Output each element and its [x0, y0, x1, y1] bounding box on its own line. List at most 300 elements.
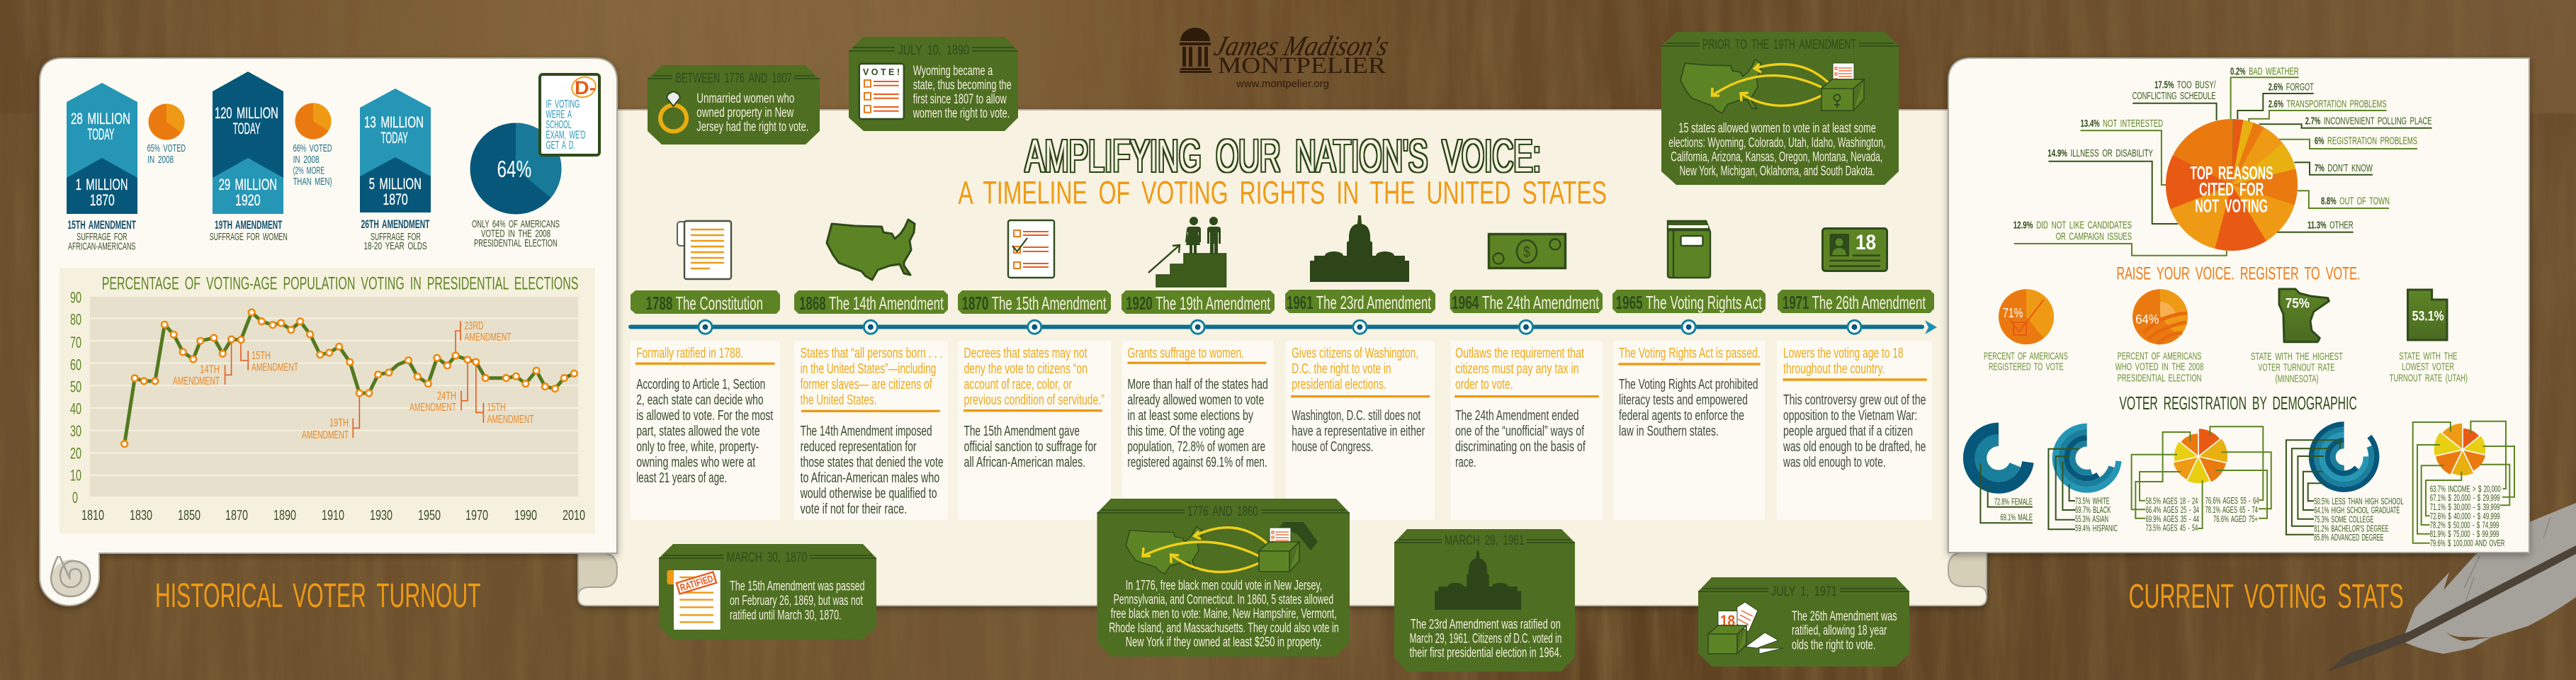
panel: 19th amendment: this time. Of the voting age [1127, 424, 1244, 439]
callout: prior to the 19th amendment: New York, Michigan, Oklahoma, and South Dakota. [1679, 164, 1875, 179]
illustration: women voting arrows from ballot box [1680, 60, 1864, 113]
y axis labels: 70 [70, 334, 81, 351]
callout: july 1, 1971: The 26th Amendment was [1792, 609, 1897, 624]
income labels [2413, 421, 2514, 548]
stat: 26th amendment arrow: SUFFRAGE FOR [371, 231, 421, 243]
pie leader labels: 14.9% ILLNESS OR DISABILITY [2047, 148, 2153, 159]
icon: constitution document [677, 221, 731, 279]
panel: 14th amendment: vote if not for their race. [801, 502, 907, 517]
callout: between 1776 and 1807: owned property in New [696, 106, 793, 120]
pie leader labels: 8.8% OUT OF TOWN [2321, 196, 2390, 208]
y axis labels: 10 [70, 466, 81, 484]
callout: july 10, 1890: Wyoming became a [913, 64, 993, 79]
income labels: 71.1% $ 30,000 - $ 39,999 [2430, 502, 2500, 512]
panel: voting rights act: federal agents to enforce the [1619, 408, 1744, 424]
icon: temple [1180, 28, 1211, 73]
label: 1961: 1961 The 23rd Amendment [1287, 292, 1431, 313]
stat: 19th amendment arrow: TODAY [233, 120, 261, 137]
panel: 23rd amendment: Washington, D.C. still does not [1292, 408, 1420, 424]
callout: march 29, 1961: MARCH 29, 1961 [1445, 533, 1524, 548]
callout: 1776 and 1860 [1097, 499, 1350, 657]
panel: the constitution: is allowed to vote. For the most [636, 408, 774, 424]
x axis labels: 1950 [418, 508, 441, 523]
y axis labels: 30 [70, 422, 81, 440]
chart: age wedge pie [2173, 428, 2228, 484]
callout: school exam note: WERE A [546, 109, 572, 120]
income labels: 78.2% $ 50,000 - $ 74,999 [2430, 520, 2499, 530]
panel: the constitution: 2, each state can decide who [636, 392, 764, 408]
income labels: 63.7% INCOME > $ 20,000 [2430, 483, 2501, 494]
stat: 26th amendment arrow [360, 89, 431, 252]
callout: 1776 and 1860: free black men to vote: Maine, New Hampshire, Vermont, [1111, 607, 1337, 622]
panel: the constitution: part, states allowed the vote [636, 424, 760, 439]
chart: education radial: 50.5% LESS THAN HIGH SCHOOL [2314, 496, 2404, 506]
chart: top reasons pie: CITED FOR [2199, 178, 2264, 200]
callout: school exam note [540, 74, 599, 155]
callout: between 1776 and 1807: Jersey had the right to vote. [696, 120, 808, 135]
panel: voting rights act: The Voting Rights Act prohibited [1619, 377, 1758, 392]
label: 1870 [958, 290, 1111, 314]
icon: Utah map: LOWEST VOTER [2402, 362, 2454, 373]
panel: 19th amendment: already allowed women to vote [1127, 392, 1264, 408]
x axis labels: 1890 [273, 508, 296, 523]
chart: 64% voted pie [2115, 289, 2203, 384]
age labels: 76.6% AGES 55 - 64 [2205, 495, 2259, 506]
callout: school exam note: IF VOTING [546, 98, 580, 110]
panel: 24th amendment: citizens must pay any tax in [1455, 361, 1579, 377]
icon: Minnesota map: 75% [2286, 296, 2310, 312]
callout: march 29, 1961: March 29, 1961. Citizens of D.C. voted in [1410, 632, 1561, 647]
chart: 71% registered pie [1984, 289, 2068, 373]
panel: 19th amendment: population, 72.8% of women are [1127, 439, 1265, 455]
pie leader labels: 12.9% DID NOT LIKE CANDIDATES [2013, 220, 2132, 232]
chart: income wedge pie [2434, 423, 2486, 476]
chart: education radial: 64.1% HIGH SCHOOL GRADUATE [2314, 504, 2400, 516]
age labels: 69.9% AGES 35 - 44 [2146, 514, 2199, 524]
subtitle: A TIMELINE OF VOTING RIGHTS IN THE UNITED STATES [958, 174, 1607, 211]
logo: James Madison's Montpelier: MONTPELIER [1218, 53, 1386, 79]
panel: 15th amendment: previous condition of servitude.” [964, 392, 1105, 408]
callout: 1776 and 1860: 1776 AND 1860 [1187, 504, 1258, 519]
panel: 24th amendment: race. [1455, 455, 1476, 470]
panel: 15th amendment: Decrees that states may not [964, 346, 1088, 361]
callout: prior to the 19th amendment: elections: Wyoming, Colorado, Utah, Idaho, Washington, [1668, 136, 1885, 151]
chart: race radial: 73.5% WHITE [2075, 496, 2110, 506]
stat: 19th amendment arrow: 19TH AMENDMENT [215, 218, 283, 232]
icon: Utah map: TURNOUT RATE (UTAH) [2390, 373, 2468, 384]
panel: the constitution: Formally ratified in 1788. [636, 346, 743, 361]
y axis labels: 80 [70, 310, 81, 329]
pie leader labels: 17.5% TOO BUSY/ [2154, 80, 2216, 91]
chart: 64% voted pie: PERCENT OF AMERICANS [2118, 351, 2201, 362]
stat: 26th amendment arrow: 18-20 YEAR OLDS [364, 240, 427, 252]
y axis labels: 20 [70, 445, 81, 462]
age labels: 66.4% AGES 25 - 34 [2146, 504, 2199, 515]
panel: 26th amendment: throughout the country. [1783, 361, 1885, 377]
icon: ballot with check [1008, 220, 1054, 278]
panel: 14th amendment: the United States. [801, 392, 876, 408]
icon: ratified document [667, 570, 721, 630]
chart: 66% voted pie [293, 103, 332, 188]
income labels: 79.6% $ 100,000 AND OVER [2430, 538, 2504, 548]
timeline arrow [628, 320, 1937, 334]
age labels: 78.1% AGES 65 - 74 [2205, 504, 2258, 515]
panel: 26th amendment [1777, 341, 1932, 520]
chart: 66% voted pie: (2% MORE [293, 164, 324, 177]
label: 1971 [1778, 290, 1934, 313]
icon: feather quill [2327, 503, 2576, 672]
panel: 19th amendment: More than half of the states had [1127, 377, 1268, 392]
chart: 66% voted pie: 66% VOTED [293, 142, 332, 154]
y axis labels: 90 [70, 289, 81, 306]
chart: education radial [2286, 424, 2404, 543]
x axis labels: 2010 [563, 508, 585, 523]
age labels: 76.6% AGED 75+ [2213, 514, 2258, 524]
amendment annotations: AMENDMENT [302, 429, 349, 441]
amendment annotations: 24TH [437, 390, 456, 402]
panel: the constitution: According to Article 1, Section [636, 377, 765, 392]
amendment annotations: 14TH [200, 364, 220, 375]
callout: between 1776 and 1807: Unmarried women who [696, 91, 794, 106]
panel: 23rd amendment: have a representative in either [1292, 424, 1425, 439]
y axis labels [70, 289, 81, 506]
stat: 15th amendment arrow: AFRICAN-AMERICANS [68, 241, 135, 252]
stat: 15th amendment arrow [67, 83, 137, 252]
amendment annotations: AMENDMENT [252, 361, 298, 374]
pie leader labels: 11.3% OTHER [2307, 220, 2354, 231]
icon: 18 ballot box: 18 [1720, 612, 1735, 630]
callout: march 29, 1961 [1394, 529, 1575, 672]
pie leader labels: 7% DON'T KNOW [2315, 163, 2373, 174]
logo: James Madison's Montpelier: James Madison's [1211, 30, 1392, 62]
stat: 26th amendment arrow: 1870 [383, 191, 408, 208]
year labels [631, 290, 1934, 314]
logo: James Madison's Montpelier: www.montpelier.org [1236, 78, 1329, 90]
callout: march 30, 1870 [659, 544, 876, 640]
icon: capitol [1310, 215, 1409, 282]
stat: 19th amendment arrow [210, 72, 288, 243]
callout: july 10, 1890: state, thus becoming the [913, 78, 1012, 93]
age labels: 58.5% AGES 18 - 24 [2146, 496, 2198, 506]
panel: voting rights act: literacy tests and empowered [1619, 392, 1748, 408]
panel: voting rights act: law in Southern states. [1619, 424, 1719, 439]
heading: voter registration by demographic: VOTER REGISTRATION BY DEMOGRAPHIC [2119, 392, 2357, 414]
pie leader labels: 0.2% BAD WEATHER [2230, 67, 2299, 78]
callout: prior to the 19th amendment: California, Arizona, Kansas, Oregon, Montana, Nevada, [1671, 149, 1882, 164]
panel: 26th amendment: opposition to the Vietnam War: [1783, 408, 1917, 424]
callout: 1776 and 1860: In 1776, free black men could vote in New Jersey, [1126, 579, 1322, 594]
label: 1868: 1868 The 14th Amendment [799, 293, 944, 314]
amendment annotations: 23RD [465, 320, 483, 332]
callout: 1776 and 1860: Pennsylvania, and Connecticut. In 1860, 5 states allowed [1114, 593, 1333, 608]
stat: 26th amendment arrow: 13 MILLION [364, 113, 424, 131]
callout: march 30, 1870: on February 26, 1869, but was not [730, 594, 863, 608]
panel: 14th amendment: The 14th Amendment imposed [801, 424, 932, 439]
label: 1961 [1285, 290, 1435, 313]
panel: 14th amendment: reduced representation for [801, 439, 917, 455]
callout: march 30, 1870: MARCH 30, 1870 [727, 550, 807, 565]
callout: 1776 and 1860: New York if they owned at least $250 in property. [1126, 635, 1322, 650]
chart: 71% registered pie: 71% [2003, 306, 2023, 320]
callout: between 1776 and 1807: BETWEEN 1776 AND 1807 [676, 71, 792, 86]
panel: the constitution [631, 341, 780, 520]
label: 1788 [631, 290, 780, 314]
panel: 14th amendment [794, 341, 948, 520]
icon: Minnesota map: STATE WITH THE HIGHEST [2251, 351, 2343, 363]
panel: 26th amendment: Lowers the voting age to 18 [1783, 346, 1904, 361]
panel: 15th amendment: all African-American males. [964, 455, 1085, 470]
panel: 14th amendment: those states that denied the vote [801, 455, 944, 470]
heading: current voting stats: CURRENT VOTING STATS [2129, 578, 2404, 616]
y axis labels: 0 [72, 489, 78, 506]
pie leader labels: 2.6% FORGOT [2269, 81, 2314, 93]
label: 1920: 1920 The 19th Amendment [1126, 293, 1271, 314]
stat: 15th amendment arrow: 1 MILLION [76, 176, 128, 193]
chart: education radial: 75.3% SOME COLLEGE [2314, 514, 2373, 524]
turnout line [125, 312, 574, 444]
amendment annotations [173, 320, 534, 441]
icon: Minnesota map: (MINNESOTA) [2275, 373, 2319, 385]
chart: voter turnout line chart [60, 268, 595, 533]
pie leader labels: 6% REGISTRATION PROBLEMS [2315, 135, 2417, 147]
panel: 14th amendment: would otherwise be qualified to [800, 486, 937, 502]
panel: voting rights act: The Voting Rights Act is passed. [1619, 346, 1761, 361]
panel: the constitution: owning males who were at [636, 455, 756, 470]
label: 1971: 1971 The 26th Amendment [1783, 292, 1926, 313]
icon: ratified document: RATIFIED [679, 572, 714, 594]
panel: 23rd amendment [1286, 341, 1435, 520]
label: 1965: 1965 The Voting Rights Act [1615, 292, 1763, 313]
panel: 15th amendment: deny the vote to citizens “on [964, 361, 1088, 377]
icon: Utah map: STATE WITH THE [2399, 351, 2458, 362]
callout: july 10, 1890: first since 1807 to allow [913, 92, 1007, 107]
callout: between 1776 and 1807 [648, 65, 820, 144]
callout: school exam note: GET A D. [546, 140, 575, 152]
x axis labels: 1850 [178, 508, 200, 523]
callout: july 1, 1971: olds the right to vote. [1792, 638, 1875, 653]
chart: 66% voted pie: IN 2008 [293, 154, 320, 166]
pie leader labels: OR CAMPAIGN ISSUES [2056, 231, 2132, 242]
panel: 14th amendment: in the United States”—including [801, 361, 936, 377]
panel: 15th amendment: account of race, color, or [964, 377, 1072, 392]
panel: the constitution: least 21 years of age. [636, 470, 727, 486]
panel: 14th amendment: States that “all persons born . . . [801, 346, 942, 361]
panel: 24th amendment: one of the “unofficial” ways of [1455, 424, 1584, 439]
x axis labels: 1830 [130, 508, 152, 523]
chart: 65% voted pie: IN 2008 [147, 154, 174, 166]
stat: 26th amendment arrow: 5 MILLION [369, 175, 422, 193]
panel: 23rd amendment: presidential elections. [1292, 377, 1386, 392]
callout: march 29, 1961: their first presidential election in 1964. [1410, 646, 1561, 661]
x axis labels: 1930 [370, 508, 392, 523]
panel: 26th amendment: was old enough to vote. [1783, 455, 1886, 470]
panel: 19th amendment: Grants suffrage to women. [1127, 346, 1244, 361]
chart title: PERCENTAGE OF VOTING-AGE POPULATION VOTING IN PRESIDENTIAL ELECTIONS [102, 273, 578, 293]
amendment annotations: AMENDMENT [465, 332, 512, 344]
chart: 64% voted pie: PRESIDENTIAL ELECTION [2118, 373, 2201, 384]
chart: top reasons pie: NOT VOTING [2195, 196, 2268, 217]
chart: top reasons pie [2166, 119, 2298, 251]
panel: 19th amendment [1122, 341, 1274, 520]
panel: 26th amendment: people argued that if a citizen [1783, 424, 1913, 439]
stat: 26th amendment arrow: TODAY [381, 129, 408, 147]
callout: prior to the 19th amendment: PRIOR TO THE 19TH AMENDMENT [1702, 38, 1856, 52]
illustration: free black men voting arrows [1126, 522, 1318, 574]
icon: scroll spiral [51, 556, 90, 596]
amendment annotations: 19TH [329, 417, 349, 429]
stat: 26th amendment arrow: 26TH AMENDMENT [361, 217, 430, 231]
panel: center timeline paper [578, 110, 1987, 606]
age labels [2132, 426, 2271, 533]
panel: 23rd amendment: house of Congress. [1292, 439, 1373, 455]
icon: Minnesota map: VOTER TURNOUT RATE [2258, 362, 2335, 373]
chart: 64% turnout pie: 64% [497, 156, 531, 182]
panel: current voting stats scroll [1948, 58, 2529, 552]
y axis labels: 50 [70, 378, 81, 395]
stat: 19th amendment arrow: 1920 [235, 191, 261, 209]
icon: ID card 18 [1822, 228, 1887, 271]
label: 1788: 1788 The Constitution [646, 293, 763, 314]
amendment annotations: 15TH [252, 350, 271, 362]
panel: 19th amendment: registered against 69.1% of men. [1127, 455, 1267, 470]
stat: 15th amendment arrow: SUFFRAGE FOR [77, 231, 128, 243]
icon: Minnesota map [2251, 289, 2343, 385]
icon: dollar bill [1489, 234, 1566, 268]
panel: 24th amendment: The 24th Amendment ended [1455, 408, 1579, 424]
stat: 15th amendment arrow: 28 MILLION [71, 110, 130, 128]
pie leader labels: CONFLICTING SCHEDULE [2132, 91, 2216, 102]
callout: july 10, 1890: JULY 10, 1890 [898, 43, 969, 58]
amendment annotations: 15TH [487, 402, 506, 414]
panel: 26th amendment: This controversy grew out of the [1783, 392, 1926, 408]
icon: Utah map: 53.1% [2412, 309, 2444, 324]
heading: raise your voice: RAISE YOUR VOICE. REGISTER TO VOTE. [2116, 264, 2360, 283]
title: AMPLIFYING OUR NATION'S VOICE: [1025, 130, 1541, 181]
callout: july 10, 1890 [849, 37, 1018, 131]
callout: school exam note: D- [575, 77, 596, 98]
panel: 14th amendment: to African-American males who [801, 470, 939, 486]
panel: 24th amendment: discriminating on the basis of [1455, 439, 1586, 455]
chart: race radial: 69.7% BLACK [2075, 504, 2111, 515]
chart: 64% turnout pie: ONLY 64% OF AMERICANS [472, 218, 560, 230]
callout: 1776 and 1860: Rhode Island, and Massachusetts. They could also vote in [1109, 621, 1339, 636]
chart: 64% voted pie: 64% [2135, 312, 2159, 327]
callout: prior to the 19th amendment: 15 states allowed women to vote in at least some [1678, 121, 1876, 136]
panel: 14th amendment: former slaves— are citizens of [801, 377, 932, 392]
callout: march 29, 1961: The 23rd Amendment was ratified on [1411, 618, 1561, 633]
x axis labels: 1810 [81, 508, 104, 523]
income labels: 72.6% $ 40,000 - $ 49,999 [2430, 511, 2500, 521]
chart: 66% voted pie: THAN MEN) [293, 176, 332, 188]
chart: 65% voted pie: 65% VOTED [147, 142, 186, 154]
chart: gender radial: 72.8% FEMALE [1994, 496, 2033, 507]
amendment annotations: AMENDMENT [487, 414, 534, 426]
stat: 19th amendment arrow: 29 MILLION [219, 176, 277, 193]
pie leader labels: 13.4% NOT INTERESTED [2081, 118, 2163, 130]
panel: 15th amendment [958, 341, 1111, 520]
callout: prior to the 19th amendment [1661, 32, 1899, 185]
label: 1964 [1450, 290, 1603, 313]
callout: july 10, 1890: women the right to vote. [913, 106, 1010, 121]
icon: vote ballot [859, 64, 904, 119]
chart: 71% registered pie: PERCENT OF AMERICANS [1984, 351, 2068, 362]
chart: race radial [2048, 426, 2119, 533]
chart: education radial: 81.2% BACHELOR'S DEGREE [2314, 523, 2389, 534]
chart: top reasons pie: TOP REASONS [2190, 162, 2273, 183]
panel: voting rights act [1613, 341, 1765, 520]
panel: 15th amendment: The 15th Amendment gave [964, 424, 1080, 439]
icon: 18 ballot box [1708, 602, 1783, 654]
panel: 24th amendment [1450, 341, 1603, 520]
heading: historical voter turnout: HISTORICAL VOTER TURNOUT [155, 577, 480, 615]
icon: people on stairs [1148, 217, 1226, 287]
panel: historical voter turnout scroll [40, 58, 617, 606]
callout: july 1, 1971: JULY 1, 1971 [1771, 584, 1837, 599]
label: 1868 [794, 290, 948, 314]
y axis labels: 40 [70, 400, 81, 418]
amendment annotations: AMENDMENT [173, 375, 220, 387]
panel: 19th amendment: in at least some elections by [1127, 408, 1253, 424]
panel: the constitution: only to free, white, property- [636, 439, 759, 455]
stat: 15th amendment arrow: 1870 [90, 191, 115, 209]
chart: education radial: 85.8% ADVANCED DEGREE [2314, 532, 2384, 543]
pie leader labels: 2.6% TRANSPORTATION PROBLEMS [2269, 98, 2387, 110]
icon: US map [827, 220, 915, 280]
chart: 64% voted pie: WHO VOTED IN THE 2008 [2115, 362, 2203, 373]
chart: 64% turnout pie: VOTED IN THE 2008 [481, 228, 550, 239]
chart: 64% turnout pie [470, 123, 561, 249]
stat: 15th amendment arrow: TODAY [88, 125, 115, 143]
amendment annotations: AMENDMENT [409, 402, 456, 414]
icon: vote ballot: V O T E ! [863, 67, 900, 77]
income labels: 81.9% $ 75,000 - $ 99,999 [2430, 528, 2499, 539]
callout: school exam note: EXAM, WE'D [546, 129, 585, 142]
callout: july 1, 1971: ratified, allowing 18 year [1792, 623, 1887, 638]
panel: 15th amendment: official sanction to suffrage for [964, 439, 1097, 455]
panel: 23rd amendment: Gives citizens of Washington, [1292, 346, 1418, 361]
x axis labels [81, 508, 585, 523]
callout: march 30, 1870: The 15th Amendment was passed [730, 579, 865, 594]
age labels: 73.5% AGES 45 - 54 [2146, 523, 2198, 533]
callout: july 1, 1971 [1698, 577, 1909, 667]
stat: 15th amendment arrow: 15TH AMENDMENT [67, 218, 136, 232]
pie leader labels [2013, 67, 2432, 256]
icon: dollar bill: $ [1523, 243, 1530, 261]
callout: school exam note: SCHOOL [546, 119, 572, 131]
logo: James Madison's Montpelier [1180, 28, 1392, 90]
pie leader labels: 2.7% INCONVENIENT POLLING PLACE [2305, 116, 2432, 128]
chart: race radial: 55.3% ASIAN [2075, 514, 2108, 524]
panel: 24th amendment: Outlaws the requirement that [1455, 346, 1584, 361]
chart: 71% registered pie: REGISTERED TO VOTE [1989, 361, 2064, 373]
label: 1920 [1122, 290, 1275, 314]
icon: ring [660, 91, 687, 132]
y axis labels: 60 [70, 356, 81, 374]
chart: gender radial [1969, 429, 2033, 523]
icon: ID card 18: 18 [1855, 231, 1876, 254]
stat: 19th amendment arrow: SUFFRAGE FOR WOMEN [210, 231, 288, 243]
icon: voting rights act book [1668, 221, 1710, 278]
icon: Utah map [2390, 290, 2468, 384]
x axis labels: 1870 [225, 508, 248, 523]
chart: gender radial: 69.1% MALE [2000, 511, 2033, 523]
label: 1870: 1870 The 15th Amendment [962, 293, 1107, 314]
panel: 24th amendment: order to vote. [1455, 377, 1513, 392]
chart: 65% voted pie [147, 103, 186, 166]
chart: 64% turnout pie: PRESIDENTIAL ELECTION [474, 237, 558, 249]
panel: 26th amendment: was old enough to be drafted, he [1783, 439, 1926, 455]
stat: 19th amendment arrow: 120 MILLION [215, 104, 278, 122]
